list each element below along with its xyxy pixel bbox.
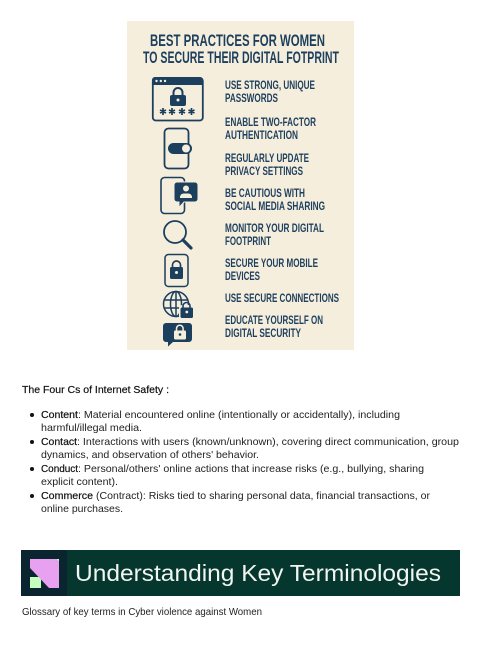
item: commerce: Commerce	[41, 491, 93, 502]
item: commerce: (Contract): Risks tied to sharing personal data, financial transactions, or	[96, 491, 431, 502]
practice: mobile devices: DEVICES	[225, 270, 260, 283]
practice: mobile devices	[225, 257, 318, 283]
list: four Cs	[30, 410, 459, 515]
practice: strong passwords	[225, 79, 315, 105]
practice: mobile devices: SECURE YOUR MOBILE	[225, 257, 318, 270]
item: contact: : Interactions with users (known/unknown), covering direct communication, group	[77, 437, 459, 448]
practice: social media: SOCIAL MEDIA SHARING	[225, 200, 325, 213]
practice: privacy settings: REGULARLY UPDATE	[225, 152, 309, 165]
poster heading: BEST PRACTICES FOR WOMEN	[150, 31, 325, 50]
practice: education: EDUCATE YOURSELF ON	[225, 314, 323, 327]
item: conduct	[30, 464, 424, 488]
practice: two-factor	[225, 116, 316, 142]
practice: education: DIGITAL SECURITY	[225, 327, 301, 340]
practice: education	[225, 314, 323, 340]
practice: secure connections: USE SECURE CONNECTIONS	[225, 292, 339, 305]
icon: globe lock	[164, 292, 193, 318]
practice: strong passwords: PASSWORDS	[225, 92, 278, 105]
poster heading	[143, 31, 339, 67]
heading: four Cs: The Four Cs of Internet Safety :	[22, 385, 169, 396]
practice: social media	[225, 187, 325, 213]
practice: privacy settings	[225, 152, 309, 178]
poster: best practices	[127, 21, 354, 350]
icon: phone toggle	[164, 128, 192, 168]
item: commerce: online purchases.	[41, 504, 123, 515]
poster heading: TO SECURE THEIR DIGITAL FOTPRINT	[143, 48, 339, 67]
item: content: : Material encountered online (intentionally or accidentally), including	[78, 410, 400, 421]
icon: magnifier	[164, 221, 191, 248]
practice: two-factor: ENABLE TWO-FACTOR	[225, 116, 316, 129]
item: conduct: Conduct	[41, 464, 78, 475]
banner title: Understanding Key Terminologies	[75, 560, 441, 586]
item: contact: dynamics, and observation of others' behavior.	[41, 450, 259, 461]
icon: banner logo	[21, 550, 67, 596]
practice: digital footprint	[225, 222, 324, 248]
practice: social media: BE CAUTIOUS WITH	[225, 187, 305, 200]
icon: browser password	[152, 77, 203, 120]
practice: two-factor: AUTHENTICATION	[225, 129, 298, 142]
icon: phone with profile bubble	[161, 178, 198, 214]
item: content	[30, 410, 400, 434]
item: conduct: : Personal/others' online actions that increase risks (e.g., bullying, sharing	[78, 464, 424, 475]
item: commerce	[30, 491, 431, 515]
icon: mobile lock	[165, 254, 188, 286]
item: content: Content	[41, 410, 78, 421]
practice: privacy settings: PRIVACY SETTINGS	[225, 165, 303, 178]
item: conduct: explicit content).	[41, 477, 118, 488]
caption: glossary: Glossary of key terms in Cyber violence against Women	[22, 607, 262, 618]
practice: digital footprint: FOOTPRINT	[225, 235, 271, 248]
item: contact: Contact	[41, 437, 77, 448]
item: contact	[30, 437, 459, 461]
practice: strong passwords: USE STRONG, UNIQUE	[225, 79, 315, 92]
icon: bubble lock	[163, 323, 192, 346]
banner: understanding key terminologies	[21, 550, 460, 596]
item: content: harmful/illegal media.	[41, 423, 142, 434]
practice: digital footprint: MONITOR YOUR DIGITAL	[225, 222, 324, 235]
